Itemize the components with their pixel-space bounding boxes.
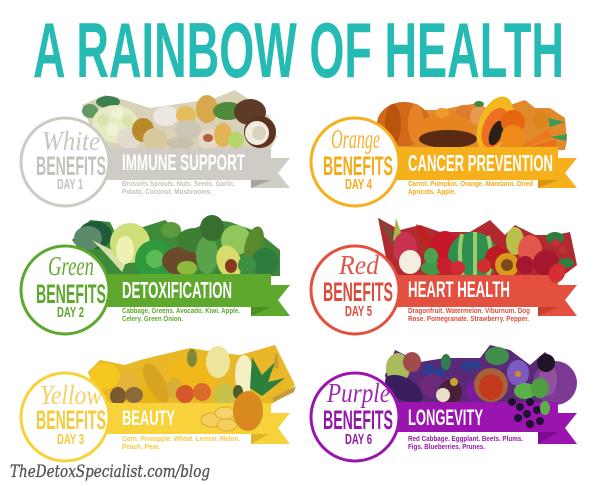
ingredients: green: Celery. Green Onion. xyxy=(122,316,183,323)
ingredients: yellow xyxy=(122,436,240,451)
badge: yellow benefits day 3: BENEFITS xyxy=(36,405,106,435)
illustration: red foods xyxy=(378,218,577,282)
badge: green benefits day 2: DAY 2 xyxy=(57,304,84,321)
badge: purple benefits day 6: BENEFITS xyxy=(323,405,393,435)
illustration: green foods xyxy=(72,215,280,282)
panel: green benefits xyxy=(21,215,290,334)
ingredients: purple: Red Cabbage. Eggplant. Beets. Plums. xyxy=(408,436,523,443)
panel: purple benefits xyxy=(311,345,577,461)
ribbon: cancer prevention xyxy=(390,147,577,188)
ingredients: green: Cabbage. Greens. Avocado. Kiwi. Apple. xyxy=(122,308,240,315)
badge: green benefits day 2 xyxy=(21,246,109,334)
badge: orange benefits day 4: BENEFITS xyxy=(323,151,393,181)
ingredients: white: Brussels Sprouts. Nuts. Seeds. Garlic. xyxy=(122,181,235,188)
badge: red benefits day 5: DAY 5 xyxy=(345,303,372,320)
ingredients: purple xyxy=(408,436,523,451)
panel: yellow benefits xyxy=(21,345,296,461)
ingredients: red: Rose. Pomegranate. Strawberry. Pepper. xyxy=(408,316,529,323)
badge: orange benefits day 4: DAY 4 xyxy=(345,176,372,193)
ingredients: orange: Carrot. Pumpkin. Orange. Mandarin. Dried xyxy=(408,181,533,188)
badge: white benefits day 1: BENEFITS xyxy=(36,151,106,181)
badge: green benefits day 2: BENEFITS xyxy=(36,279,106,309)
ribbon: longevity xyxy=(390,378,577,444)
ribbon: beauty xyxy=(100,391,290,444)
ribbon: heart health xyxy=(390,261,577,316)
badge: purple benefits day 6: DAY 6 xyxy=(345,431,372,448)
badge: yellow benefits day 3 xyxy=(21,373,109,461)
badge: white benefits day 1 xyxy=(21,118,109,206)
badge: red benefits day 5 xyxy=(311,246,399,334)
badge: white benefits day 1: DAY 1 xyxy=(57,176,83,193)
badge: yellow benefits day 3: DAY 3 xyxy=(57,431,84,448)
ingredients: yellow: Peach. Pear. xyxy=(122,444,160,451)
ribbon: detoxification: DETOXIFICATION xyxy=(122,277,232,303)
ingredients: white xyxy=(122,181,235,196)
ingredients: purple: Figs. Blueberries. Prunes. xyxy=(408,444,485,451)
ingredients: red: Dragonfruit. Watermelon. Viburnum. Dog xyxy=(408,308,530,315)
badge: white benefits day 1: White xyxy=(42,126,100,156)
badge: orange benefits day 4 xyxy=(311,118,399,206)
ingredients: white: Potato. Coconut. Mushrooms. xyxy=(122,189,212,196)
panel: white benefits xyxy=(21,90,290,206)
badge: red benefits day 5: BENEFITS xyxy=(323,277,393,307)
ingredients: yellow: Corn. Pineapple. Wheat. Lemon. Melon. xyxy=(122,436,240,443)
badge: purple benefits day 6: Purple xyxy=(326,378,390,408)
ribbon: beauty: BEAUTY xyxy=(122,407,175,430)
ribbon: immune support xyxy=(100,148,290,188)
ingredients: green xyxy=(122,308,240,323)
ingredients: red xyxy=(408,308,530,323)
panel: orange benefits xyxy=(311,91,577,206)
badge: orange benefits day 4: Orange xyxy=(331,124,380,154)
illustration: white foods xyxy=(82,90,277,150)
ribbon: longevity: LONGEVITY xyxy=(408,405,483,430)
footer url: TheDetoxSpecialist.com/blog xyxy=(10,462,210,482)
badge: yellow benefits day 3: Yellow xyxy=(40,380,102,410)
illustration: orange foods xyxy=(377,91,567,157)
illustration: purple foods xyxy=(380,345,577,409)
badge: green benefits day 2: Green xyxy=(48,251,94,281)
badge: purple benefits day 6 xyxy=(311,373,399,461)
ribbon: heart health: HEART HEALTH xyxy=(408,277,510,302)
illustration: yellow foods xyxy=(88,345,296,412)
ingredients: orange: Apricots. Apple. xyxy=(408,189,456,196)
panel: red benefits xyxy=(311,218,577,334)
ribbon: detoxification xyxy=(100,274,290,316)
ribbon: immune support: IMMUNE SUPPORT xyxy=(122,150,245,175)
badge: red benefits day 5: Red xyxy=(338,250,379,280)
ingredients: orange xyxy=(408,181,533,196)
